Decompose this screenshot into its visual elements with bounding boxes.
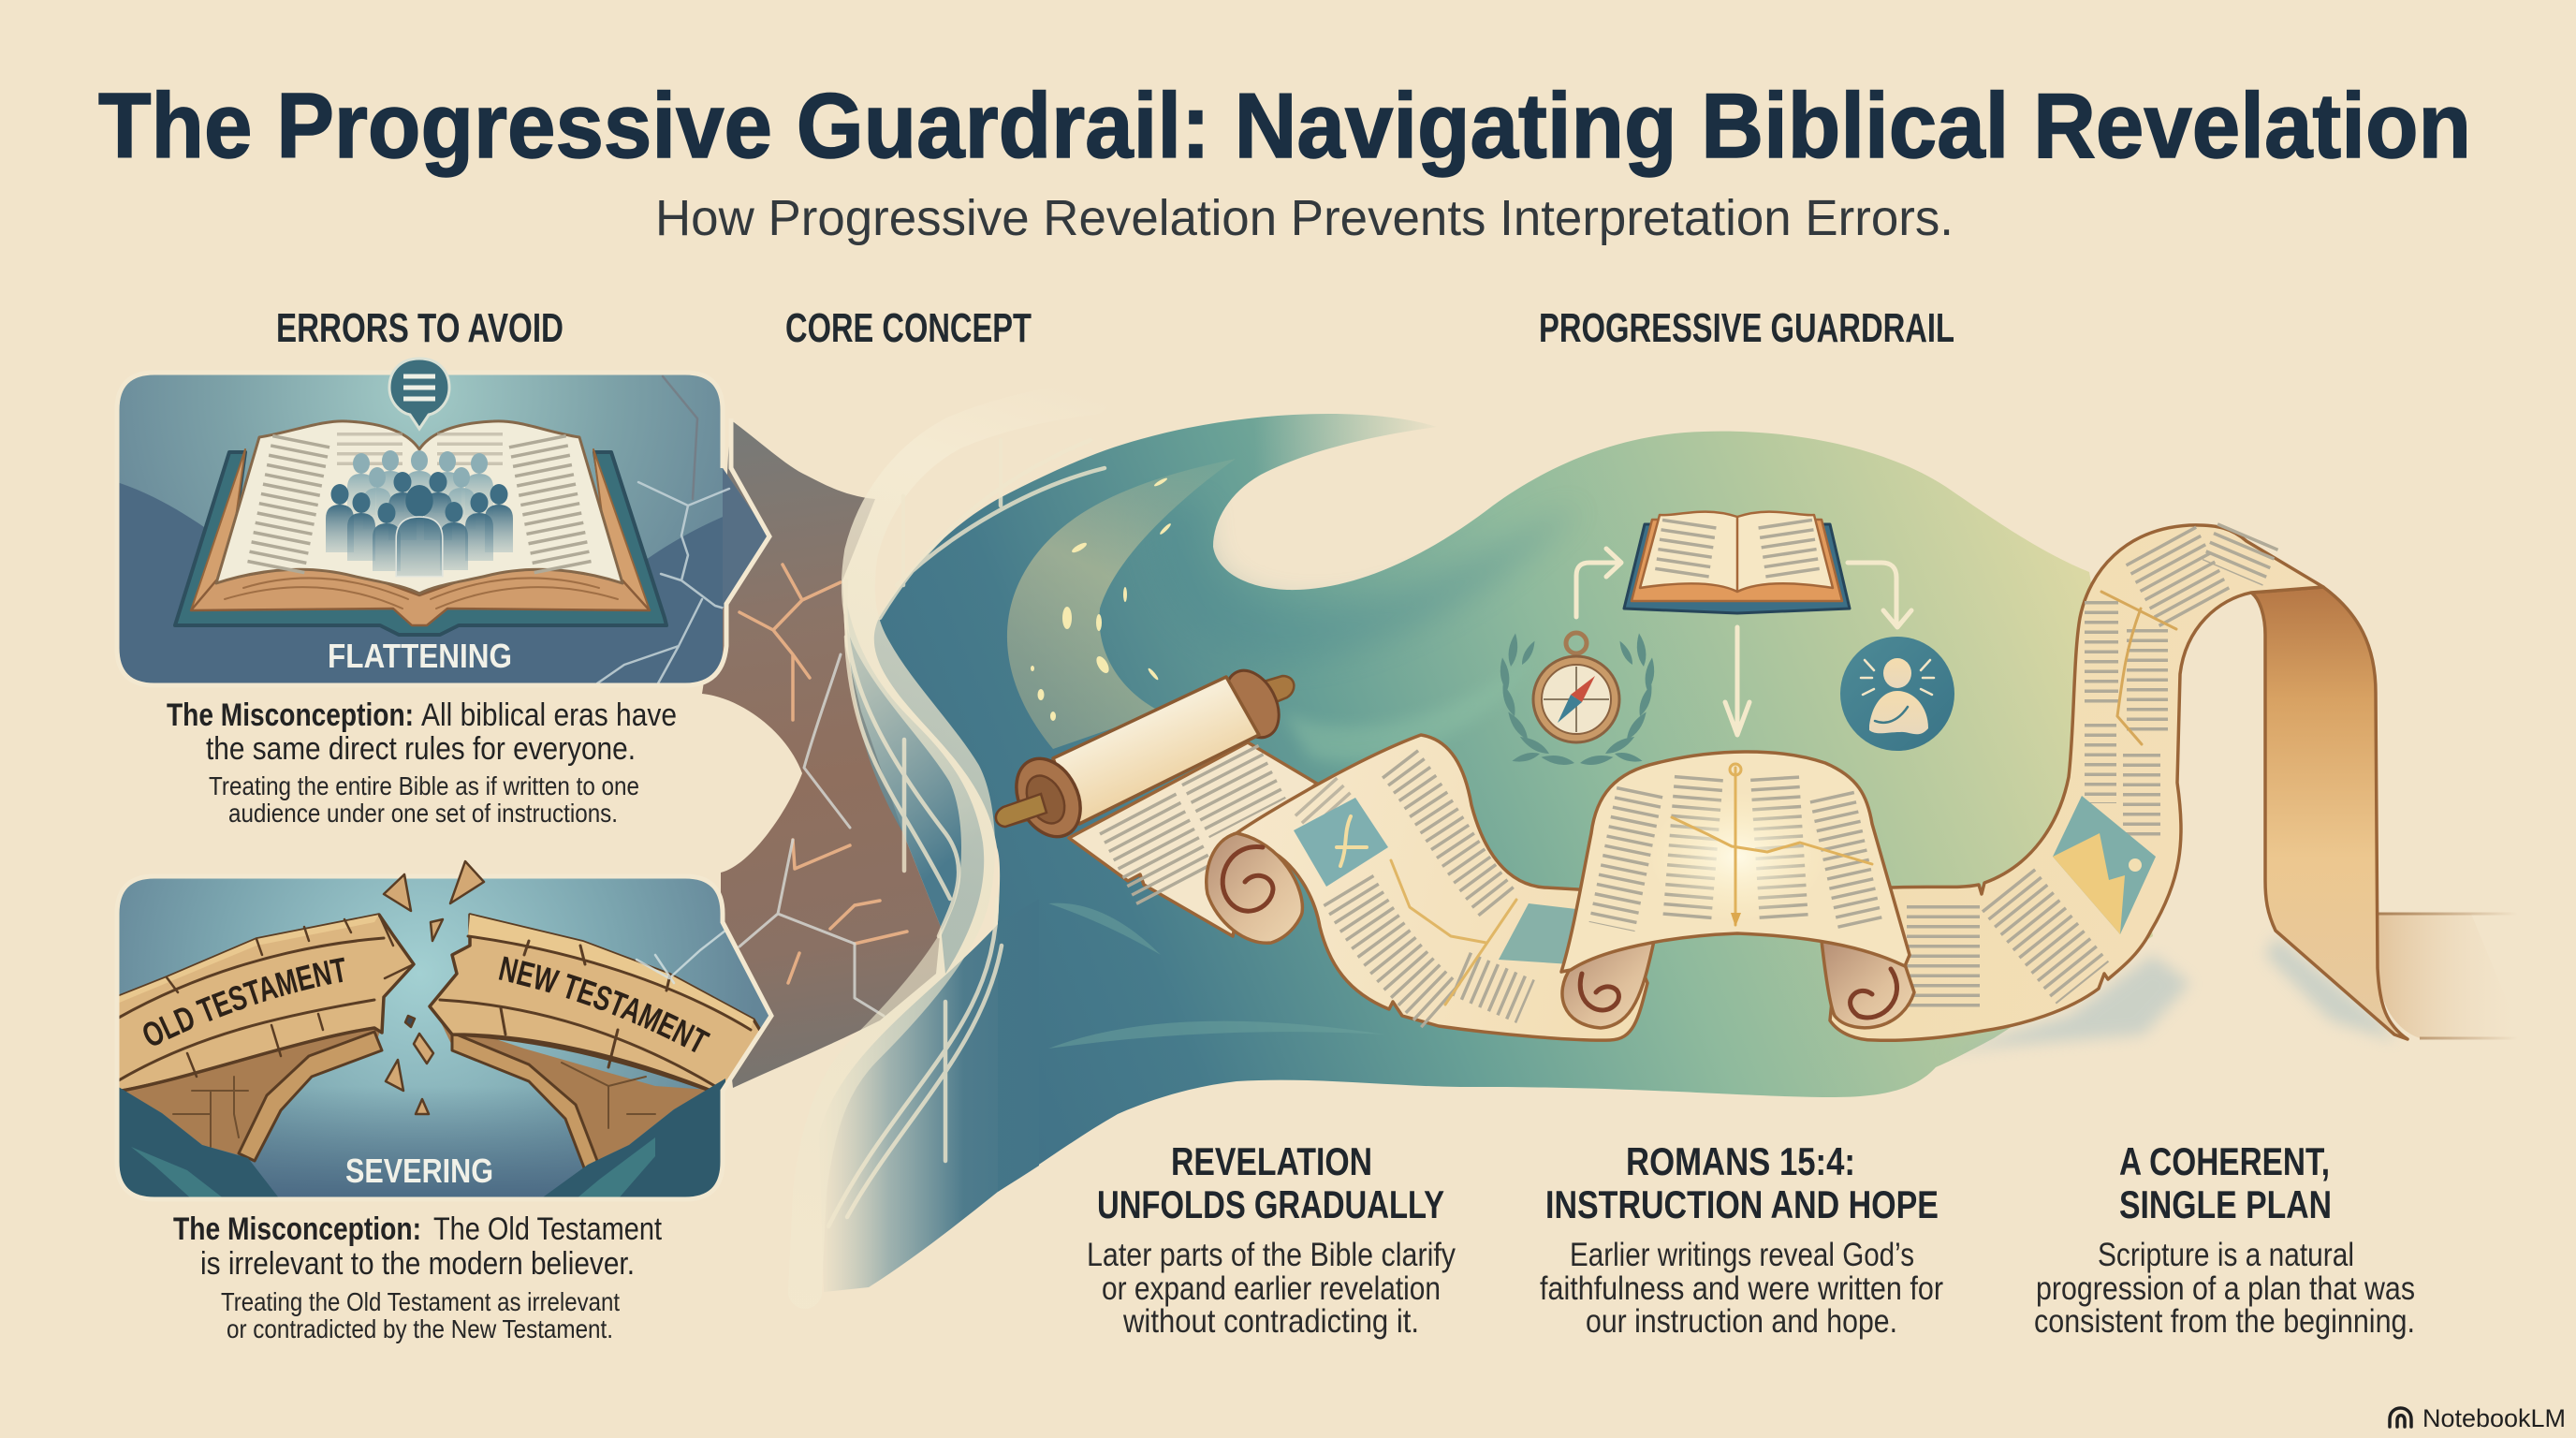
text block: flattening misconception: The Misconception:	[167, 697, 414, 733]
subtitle: How Progressive Revelation Prevents Interpretation Errors.	[655, 190, 1954, 246]
text block: a coherent single plan: Scripture is a natural	[2098, 1237, 2354, 1273]
page block	[191, 449, 650, 625]
text block: severing misconception: or contradicted by the New Testament.	[227, 1314, 613, 1343]
faded grain tail	[1254, 412, 1442, 477]
panel: severing	[120, 859, 774, 1196]
text block: a coherent single plan: A COHERENT,	[2119, 1139, 2330, 1183]
ribbon floor tail	[2378, 914, 2523, 1038]
arch section curl backs	[1562, 941, 1654, 1028]
text block: severing misconception	[173, 1211, 662, 1343]
arch ring right	[452, 1033, 599, 1170]
flat sheet under roller	[1069, 742, 1317, 936]
text block: revelation unfolds gradually: UNFOLDS GRADUALLY	[1097, 1182, 1444, 1226]
ribbon picture	[2053, 796, 2156, 934]
right arch brick	[442, 1024, 706, 1159]
deck left	[117, 915, 414, 1091]
ribbon front section	[1830, 525, 2323, 1040]
text block: revelation unfolds gradually: Later parts of the Bible clarify	[1087, 1237, 1456, 1273]
roller handles	[996, 676, 1294, 827]
text block: romans 15:4: our instruction and hope.	[1586, 1303, 1897, 1340]
arrow: compass to book	[1576, 549, 1621, 617]
arch glow	[1648, 791, 1826, 922]
heading: progressive guardrail: PROGRESSIVE GUARDRAIL	[1539, 305, 1954, 351]
ribbon reverse side	[2251, 587, 2408, 1039]
text block: revelation unfolds gradually: without contradicting it.	[1122, 1303, 1419, 1340]
text block: flattening misconception: Treating the entire Bible as if written to one	[209, 771, 639, 800]
lower light streak	[1048, 903, 1385, 1049]
text block: romans 15:4: ROMANS 15:4:	[1626, 1139, 1855, 1183]
text block: severing misconception: The Old Testament	[433, 1211, 662, 1247]
rear curl	[1207, 833, 1302, 943]
glass ribbon band	[805, 398, 1093, 1292]
text block: romans 15:4: INSTRUCTION AND HOPE	[1545, 1182, 1939, 1226]
light green sweep	[1282, 655, 1535, 762]
ribbon text lines	[1907, 905, 1980, 1012]
text block: flattening misconception: All biblical eras have	[421, 697, 677, 733]
golden light trail	[1007, 459, 1236, 749]
label: old testament: OLD TESTAMENT	[143, 957, 344, 1046]
panel cracks	[597, 482, 747, 683]
pale cracks	[739, 654, 884, 1016]
deck right	[430, 915, 777, 1095]
wave gold path	[1391, 860, 1516, 1005]
glass guardrail	[805, 398, 1105, 1292]
icon: compass with laurel wreath	[1499, 633, 1656, 767]
heading: errors to avoid: ERRORS TO AVOID	[276, 305, 564, 351]
arrow: book to person	[1848, 563, 1911, 627]
text block: flattening misconception: the same direct rules for everyone.	[206, 731, 636, 767]
panel label: flattening: FLATTENING	[328, 637, 512, 675]
glass fill low	[819, 899, 1039, 1292]
wave pictures	[1294, 798, 1388, 887]
icon: open book with people	[175, 421, 666, 635]
sparkles	[1031, 477, 1172, 721]
panel label: severing: SEVERING	[345, 1152, 493, 1190]
pages	[216, 421, 622, 594]
wave text lines	[1399, 763, 1498, 903]
page text lines	[275, 440, 301, 571]
heading: core concept: CORE CONCEPT	[785, 305, 1032, 351]
text block: revelation unfolds gradually: or expand earlier revelation	[1102, 1270, 1441, 1307]
arch section	[1561, 752, 1910, 972]
text block: flattening misconception: audience under one set of instructions.	[228, 799, 618, 828]
text block: severing misconception: Treating the Old Testament as irrelevant	[221, 1287, 620, 1316]
cracked ground connecting errors to the guardrail	[702, 419, 941, 1088]
panel border	[117, 876, 771, 1199]
orange cracks	[739, 565, 907, 983]
scroll shadows	[1938, 936, 2396, 1053]
icon: speech bubble	[389, 359, 449, 429]
text block: a coherent single plan: progression of a plan that was	[2036, 1270, 2415, 1307]
swirl band	[1146, 506, 1582, 662]
panel cracks	[637, 927, 730, 983]
fading crowd	[326, 450, 513, 577]
logo: NotebookLM: NotebookLM	[2422, 1404, 2566, 1432]
broken fragments	[384, 861, 484, 1114]
text block: romans 15:4: Earlier writings reveal God’s	[1570, 1237, 1914, 1273]
text block: a coherent single plan	[2034, 1139, 2415, 1340]
panel floor hill	[120, 483, 754, 683]
flowing river background	[874, 412, 2153, 1192]
floor fade	[214, 1099, 582, 1196]
roller body	[1053, 677, 1259, 824]
icon: small open book	[1624, 512, 1850, 613]
cliffs	[117, 1086, 280, 1199]
arch ring left	[239, 1032, 382, 1161]
text block: severing misconception: The Misconception:	[173, 1211, 421, 1247]
panel border	[117, 373, 769, 685]
text block: a coherent single plan: consistent from the beginning.	[2034, 1303, 2415, 1340]
arch gold path	[1672, 764, 1872, 927]
scroll: unfolding parchment	[996, 525, 2523, 1053]
glass outer lines and posts	[828, 440, 1105, 1226]
laurel left	[1499, 633, 1575, 767]
label: new testament: NEW TESTAMENT	[498, 957, 711, 1052]
text block: revelation unfolds gradually: REVELATION	[1171, 1139, 1372, 1183]
laurel right	[1579, 633, 1656, 767]
roller far disc	[1215, 662, 1290, 746]
book cover	[175, 452, 666, 635]
text block: revelation unfolds gradually	[1087, 1139, 1456, 1340]
icon: person with hand on heart	[1840, 637, 1954, 751]
text block: romans 15:4	[1540, 1139, 1943, 1340]
arrow: book down to scroll	[1725, 627, 1749, 735]
text block: romans 15:4: faithfulness and were written for	[1540, 1270, 1943, 1307]
text block: severing misconception: is irrelevant to the modern believer.	[200, 1246, 635, 1282]
ribbon gold path	[2101, 592, 2176, 744]
panel: flattening	[117, 359, 777, 712]
middle wave section	[1237, 735, 1647, 1040]
roller near disc	[996, 748, 1093, 847]
arch text lines	[1612, 791, 1640, 927]
arch brick left	[117, 1025, 382, 1158]
text block: a coherent single plan: SINGLE PLAN	[2119, 1182, 2332, 1226]
glass fill mid	[846, 599, 984, 974]
text block: flattening misconception	[167, 697, 677, 828]
title: The Progressive Guardrail: Navigating Biblical Revelation	[98, 74, 2471, 177]
